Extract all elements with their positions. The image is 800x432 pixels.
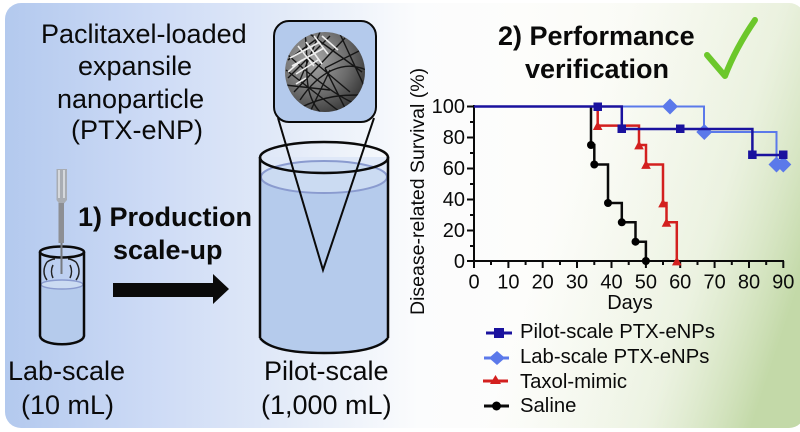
y tick labels: 100 [432,96,465,118]
x tick labels: 50 [635,272,657,294]
label: lab-scale: Lab-scale [8,356,125,386]
x tick labels [468,272,794,294]
series: lab-scale [474,98,791,172]
x tick labels: 80 [738,272,760,294]
label: production scale-up: scale-up [113,235,223,265]
icon: green check mark [707,20,755,76]
y tick labels: 0 [454,251,465,273]
icon: pilot-scale beaker [260,118,388,353]
legend: saline: Saline [520,395,576,417]
x axis label: Days [607,292,653,314]
label: pilot-scale: Pilot-scale [264,356,389,386]
y tick labels: 80 [443,127,465,149]
label: production scale-up [78,202,252,265]
x tick labels: 90 [772,272,794,294]
x tick labels: 40 [600,272,623,294]
y tick labels [432,96,465,273]
heading: nanoparticle name: Paclitaxel-loaded [41,19,247,49]
legend: saline [484,395,576,417]
y axis label: Disease-related Survival (%) [407,68,429,315]
legend [483,321,715,417]
heading: performance verification: 2) Performance [498,21,695,51]
y tick labels: 40 [443,189,465,211]
heading: nanoparticle name [41,19,247,145]
heading: nanoparticle name: expansile [78,51,192,81]
icon: nanoparticle inset [274,21,376,122]
legend: pilot-scale: Pilot-scale PTX-eNPs [520,321,715,343]
label: pilot-scale [261,356,392,420]
heading: nanoparticle name: nanoparticle [57,84,204,114]
label: production scale-up: 1) Production [78,202,252,232]
axes [467,105,784,268]
legend: lab-scale: Lab-scale PTX-eNPs [520,346,709,368]
arrow: scale-up [113,274,229,304]
y tick labels: 60 [443,158,465,180]
survival chart [407,68,794,315]
x tick labels: 10 [497,272,520,294]
x tick labels: 20 [532,272,554,294]
x tick labels: 30 [566,272,588,294]
series: pilot-scale [474,103,787,158]
x tick labels: 0 [468,272,480,294]
heading: nanoparticle name: (PTX-eNP) [71,115,203,145]
x tick labels: 70 [703,272,726,294]
heading: performance verification [498,21,695,84]
y tick labels: 20 [443,220,465,242]
label: lab-scale: (10 mL) [21,390,114,420]
x tick labels: 60 [669,272,691,294]
heading: performance verification: verification [525,54,669,84]
series: taxol-mimic [593,106,682,265]
label: pilot-scale: (1,000 mL) [261,390,392,420]
legend: taxol-mimic: Taxol-mimic [520,371,627,393]
icon: lab-scale vial with sonicator probe [40,169,84,344]
series: saline [587,106,650,265]
label: lab-scale [8,356,125,420]
